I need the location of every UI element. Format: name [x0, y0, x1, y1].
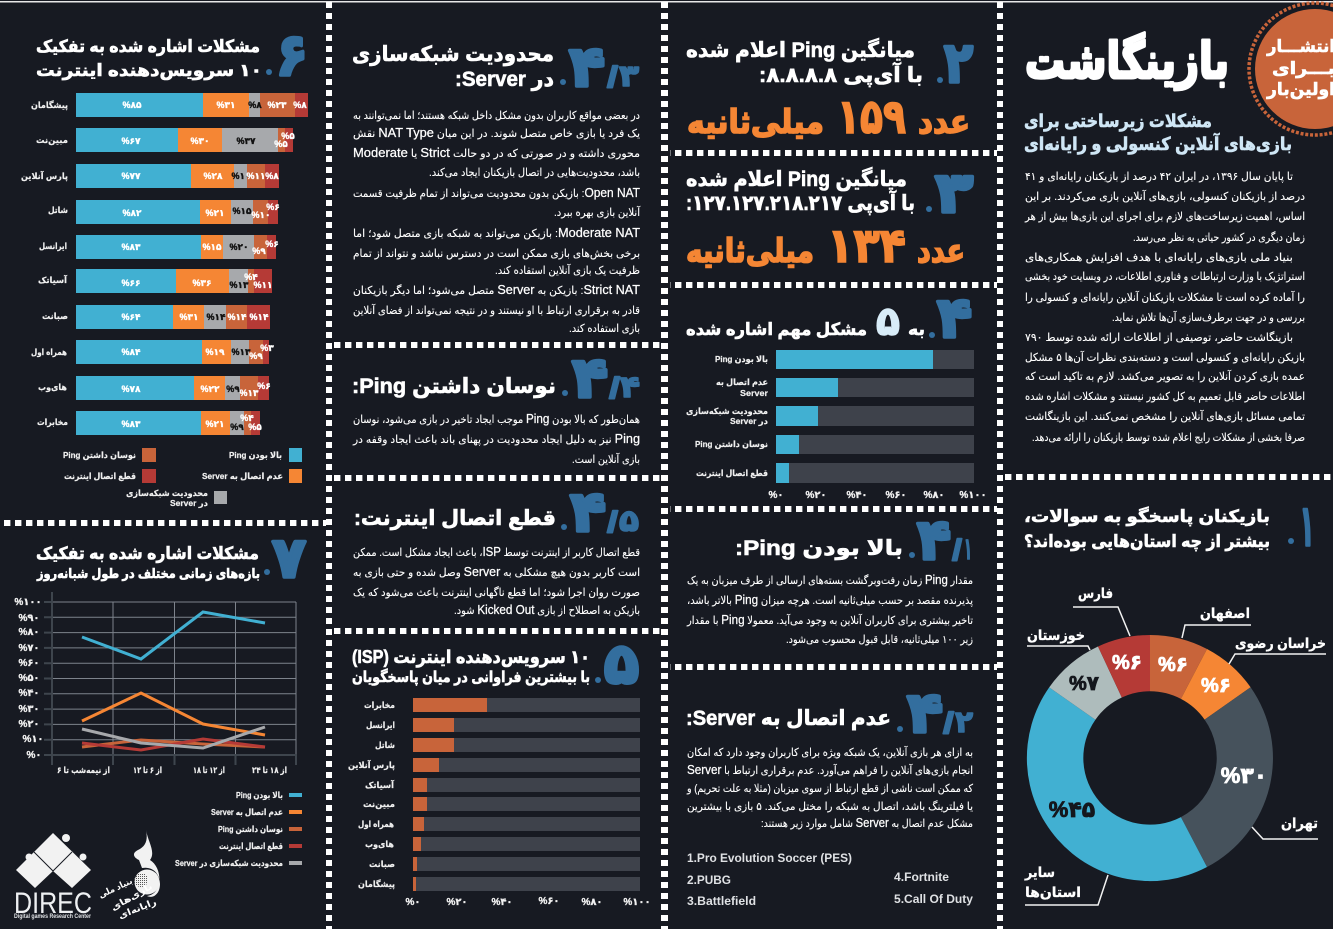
row: Asiatech: %۱۱ — [254, 280, 272, 290]
intro text: درصد از بازیکنان کنسولی، بازی‌های آنلاین بازی می‌کردند. بر این — [1025, 189, 1305, 203]
body text 4/5 — [353, 544, 640, 617]
legend panel 6: در Server — [170, 498, 209, 509]
body text 4/3: ظرفیت یک بازی آنلاین استفاده کند. — [495, 263, 640, 277]
numeral 1 — [1288, 494, 1314, 557]
value: 159 ms: میلی‌ثانیه — [687, 103, 824, 140]
list of games: 3.Battlefield — [687, 894, 756, 908]
row: Pishgaman: %۸ — [293, 100, 307, 110]
legend panel 6: نوسان داشتن Ping — [63, 450, 136, 461]
body text 4/3: Strict NAT: بازیکن به Server متصل می‌شود؛ اما دیگر بازیکنان — [353, 282, 640, 297]
row: Sabanet: %۶۴ — [122, 312, 141, 322]
heading panel 1: بازیکنان پاسخگو به سوالات، — [1024, 506, 1270, 527]
legend panel 7: بالا بودن Ping — [236, 790, 283, 801]
intro text: اساس، اهمیت زیرساخت‌های لازم برای اجرای این بازی‌ها بیش از هر — [1024, 211, 1305, 223]
x axis: %۸۰ — [581, 897, 603, 908]
x axis: %۸۰ — [923, 490, 945, 501]
row: Irancell: %۸۳ — [122, 242, 141, 252]
row: Mokhaberat: %۲۱ — [206, 419, 224, 429]
donut values: %۶ — [1158, 654, 1188, 676]
row: Pars Online: %۷۷ — [122, 171, 141, 181]
logo: DIREC — [14, 833, 92, 920]
body text 4/2: انجام بازی‌های آنلاین را فراهم می‌آورد. عدم برقراری ارتباط با Server — [687, 762, 973, 777]
ISP names: صبانت — [369, 859, 395, 869]
donut values — [1049, 652, 1267, 822]
row: Irancell: ایرانسل — [39, 241, 67, 252]
intro text: بازیکن رایانه‌ای و کنسولی است و دسته‌بندی نظرات آن‌ها ۵ مشکل — [1025, 350, 1305, 364]
row: Pars Online: پارس آنلاین — [21, 170, 68, 182]
value: 134 ms: ۱۳۴ — [827, 220, 906, 273]
heading 4/2: عدم اتصال به Server: — [686, 707, 891, 730]
row: Mobinnet: %۳۰ — [190, 136, 210, 146]
row: Pars Online: %۱۱ — [246, 171, 266, 181]
x axis: %۱۰۰ — [959, 490, 987, 501]
value: 159 ms — [687, 91, 970, 144]
ISP names: شاتل — [375, 740, 395, 750]
row: Shatel: %۱۵ — [232, 206, 252, 216]
x axis — [768, 490, 987, 501]
row: Mokhaberat: %۵ — [248, 422, 262, 432]
heading panel 6: ۱۰ سرویس‌دهنده اینترنت — [36, 61, 262, 81]
y axis labels — [14, 597, 44, 761]
row: HiWeb: %۱۳ — [240, 388, 259, 398]
row: Shatel: %۲۱ — [206, 208, 224, 218]
panel 4/3: network limitation — [352, 35, 641, 335]
body text 4/2: یا فیلترینگ باشد، اتصال به شبکه را مختل می‌کند. ۵ بازی با بیشترین — [687, 800, 973, 813]
ISP names: آسیاتک — [365, 779, 395, 790]
logo: national games foundation: بنیاد ملی — [97, 876, 134, 900]
body text 4/5: قطع اتصال کاربر از اینترنت توسط ISP، باعث ایجاد مشکل است. ممکن — [353, 544, 640, 559]
row: Pars Online — [21, 164, 279, 188]
intro text: بازینگاشت حاضر، توصیفی از اطلاعات ارائه شده توسط ۷۹۰ — [1025, 331, 1293, 344]
x axis: %۰ — [768, 490, 784, 501]
heading panel 4 — [686, 300, 925, 344]
intro text: را آماده کرده است تا مشکلات بازیکنان آنلاین رایانه‌ای و کنسولی را — [1025, 290, 1305, 304]
value: 159 ms: عدد — [918, 103, 970, 140]
body text 4/1 — [686, 572, 973, 646]
heading panel 3 — [686, 166, 915, 215]
body text 4/3: در بعضی مواقع کاربران بدون مشکل داخل شبکه هستند؛ اما نمی‌توانند به — [353, 110, 640, 122]
numeral 4/4: ۴ — [572, 346, 608, 409]
y axis labels: %۲۰ — [18, 719, 40, 730]
row: Pars Online: %۲۸ — [204, 171, 223, 181]
y axis labels: %۴۰ — [18, 688, 40, 699]
panel 4: five problems — [686, 286, 987, 501]
text: ۱ — [964, 533, 972, 566]
panel 3: ping 127.127.218.217 — [686, 161, 973, 273]
donut labels — [1024, 585, 1326, 900]
heading panel 3: میانگین Ping اعلام شده — [686, 166, 907, 191]
row: Hamrahe Aval: %۱۹ — [206, 347, 225, 357]
row: Mokhaberat — [37, 411, 262, 435]
row: Hamrahe Aval: همراه اول — [31, 347, 67, 358]
heading panel 2: با آی‌پی ۸.۸.۸.۸: — [759, 62, 923, 87]
body text 4/3: بازی استفاده کند. — [569, 323, 640, 335]
donut values: %۳۰ — [1221, 763, 1267, 788]
row: HiWeb: های‌وب — [38, 382, 67, 393]
panel 4/4: ping fluctuation — [352, 346, 640, 466]
body text 4/3 — [353, 110, 641, 335]
row: Hamrahe Aval: %۱۳ — [232, 347, 251, 357]
body text 4/1: تاخیر بیشتری برای کاربران آنلاین به وجود می‌آید. معمولا Ping با مقدار — [686, 612, 973, 627]
numeral 4/1: / — [952, 534, 963, 567]
bar chart: five problems — [686, 350, 987, 501]
problem names: محدودیت شبکه‌سازی — [686, 406, 768, 417]
donut values: %۶ — [1112, 652, 1142, 674]
row: Pishgaman: %۸۵ — [122, 100, 142, 110]
body text 4/2: که ممکن است ناشی از قطع ارتباط از سوی میزبان (مثلا به علت تحریم) و — [686, 783, 974, 795]
panel 1: provinces — [1024, 494, 1326, 905]
y axis labels: %۱۰۰ — [14, 597, 42, 608]
row: Shatel: %۸۲ — [122, 208, 142, 218]
body text 4/4 — [352, 411, 640, 466]
donut labels: تهران — [1281, 815, 1318, 832]
row: Pars Online: %۱۰ — [232, 171, 250, 181]
heading panel 1: بیشتر از چه استان‌هایی بوده‌اند؟ — [1024, 532, 1270, 552]
y axis labels: %۸۰ — [18, 627, 40, 638]
bar chart: ISP share — [348, 698, 651, 908]
intro text: تمامی مسائل بازی‌های آنلاین را مشخص نمی‌کنند. این بازینگاشت — [1025, 409, 1305, 423]
line chart — [14, 592, 296, 776]
numeral 2: ۲ — [944, 31, 973, 94]
row: Mokhaberat: %۴ — [240, 413, 254, 423]
legend panel 7: عدم اتصال به Server — [211, 807, 283, 818]
row: Mokhaberat: %۸۳ — [122, 419, 141, 429]
heading panel 5 — [352, 647, 590, 687]
problem names: در Server — [730, 416, 769, 427]
x axis labels: از ۱۲ تا ۱۸ — [193, 765, 225, 776]
heading panel 2 — [686, 37, 923, 87]
donut values: %۷ — [1069, 673, 1099, 695]
logo: DIREC: Digital games Research Center — [14, 914, 92, 920]
problem names — [686, 354, 769, 479]
numeral 4/2 — [897, 681, 973, 744]
ISP names: پارس آنلاین — [348, 759, 395, 771]
badge: first publication — [1249, 3, 1333, 135]
row: Irancell: %۱۵ — [202, 242, 222, 252]
row: Mobinnet: %۶۷ — [122, 136, 141, 146]
list of games — [687, 851, 973, 908]
x axis labels: از ۱۸ تا ۲۴ — [252, 765, 287, 776]
row: Asiatech: %۱۳ — [230, 280, 249, 290]
y axis labels: %۶۰ — [18, 658, 40, 669]
body text 4/2: مشکل عدم اتصال به Server شامل موارد زیر هستند: — [761, 815, 973, 830]
donut leader lines — [1025, 607, 1326, 905]
x axis: %۱۰۰ — [623, 897, 651, 908]
legend panel 7 — [175, 790, 302, 869]
problem names: نوسان داشتن Ping — [695, 439, 768, 450]
body text 4/4: Ping نیز به دلیل ایجاد محدودیت در پهنای باند باعث ایجاد وقفه در — [352, 431, 640, 446]
ISP names: پیشگامان — [358, 879, 395, 889]
value: 134 ms — [686, 220, 965, 273]
logo: national games foundation: بازی‌های — [109, 881, 154, 914]
donut chart — [1027, 635, 1273, 881]
ISP names: ایرانسل — [366, 720, 395, 731]
heading panel 7: مشکلات اشاره شده به تفکیک — [36, 544, 259, 563]
body text 4/3: برخی بخش‌های بازی ممکن است در دسترس نباشد و نتواند از تمام — [353, 248, 640, 260]
logo: national games foundation — [97, 830, 160, 922]
problem names: قطع اتصال اینترنت — [696, 468, 768, 479]
body text 4/1: مقدار Ping زمان رفت‌وبرگشت بسته‌های ارسالی از طرف میزبان به یک — [687, 572, 973, 587]
y axis labels: %۷۰ — [18, 643, 40, 654]
row: Shatel — [48, 200, 280, 224]
row: Pishgaman — [31, 93, 308, 117]
heading 4/1: بالا بودن Ping: — [735, 537, 903, 560]
heading panel 7 — [36, 544, 260, 581]
panel 4/5: internet disconnect — [353, 480, 640, 617]
row: Asiatech: %۴ — [244, 272, 258, 282]
problem names: بالا بودن Ping — [715, 354, 768, 365]
heading 4/3: در Server: — [455, 68, 554, 91]
row: Irancell: %۶ — [265, 239, 279, 249]
row: Sabanet: %۱۴ — [228, 312, 247, 322]
body text 4/3: Open NAT: بازیکن بدون محدودیت می‌تواند از تمام ظرفیت قسمت — [353, 185, 640, 200]
legend panel 7: نوسان داشتن Ping — [218, 824, 283, 835]
body text 4/3: آنلاین بازی بهره ببرد. — [554, 205, 641, 219]
x axis: %۲۰ — [446, 897, 468, 908]
problem names: Server — [740, 388, 769, 398]
intro text — [1024, 171, 1305, 444]
intro text: بررسی و در جهت برطرف‌سازی آن‌ها تلاش نماید. — [1112, 310, 1305, 324]
numeral 4/1 — [909, 508, 972, 571]
donut labels: فارس — [1078, 585, 1113, 601]
subtitle — [1024, 111, 1292, 155]
numeral 4/1: ۴ — [917, 508, 951, 571]
body text 4/3: یک فرد یا بازی خاص متصل شوند. در این میان NAT Type نقش — [353, 125, 640, 140]
donut labels: سایر — [1024, 864, 1055, 881]
x axis labels — [57, 765, 287, 776]
intro text: بنیاد ملی بازی‌های رایانه‌ای با هدف افزایش همکاری‌های — [1025, 252, 1293, 264]
ISP names: همراه اول — [358, 819, 394, 830]
row: Shatel: شاتل — [48, 205, 68, 215]
numeral 4: ۴ — [937, 286, 972, 349]
row: Pishgaman: %۳۱ — [216, 100, 236, 110]
numeral 4/4: / — [609, 372, 621, 405]
ISP names: های‌وب — [365, 839, 394, 850]
intro text: زمان دیگری در کشور حیاتی به نظر می‌رسد. — [1133, 231, 1305, 244]
y axis labels: %۰ — [26, 750, 42, 761]
row: Pars Online: %۸ — [265, 171, 279, 181]
list of games: 2.PUBG — [687, 873, 731, 887]
legend panel 6: قطع اتصال اینترنت — [64, 471, 136, 482]
heading panel 4: به — [908, 320, 925, 339]
legend panel 6: محدودیت شبکه‌سازی — [126, 488, 208, 499]
body text 4/3: قادر به برقراری ارتباط با او نیستند و در نتیجه نمی‌تواند از فضای آنلاین — [353, 303, 640, 317]
x axis: %۴۰ — [846, 490, 868, 501]
intro text: اطلاعات حاضر قابل تعمیم به کل کشور نیستند و مشکلات اشاره شده — [1025, 391, 1305, 403]
row: Pishgaman: پیشگامان — [31, 100, 68, 110]
heading panel 2: میانگین Ping اعلام شده — [686, 37, 915, 62]
numeral 4/3: ۳ — [619, 60, 639, 93]
donut values: %۶ — [1201, 675, 1231, 697]
numeral 4/2: ۴ — [907, 681, 943, 744]
row: Mobinnet — [36, 128, 295, 152]
row: Mobinnet: مبین‌نت — [36, 135, 68, 146]
panel 7: problems by time of day — [14, 526, 306, 922]
heading 4/3 — [352, 43, 554, 91]
heading 4/4: نوسان داشتن Ping: — [352, 375, 556, 398]
intro text: تا پایان سال ۱۳۹۶، در ایران ۴۲ درصد از بازیکنان رایانه‌ای و ۴۱ — [1025, 171, 1293, 183]
x axis — [406, 896, 651, 908]
list of games: 4.Fortnite — [894, 870, 949, 884]
row: Irancell: %۲۰ — [230, 242, 248, 252]
row: Hamrahe Aval: %۹ — [249, 351, 263, 361]
badge: first publication: بـــرای — [1272, 59, 1333, 79]
heading panel 3: با آی‌پی ۱۲۷.۱۲۷.۲۱۸.۲۱۷: — [686, 190, 915, 215]
ISP names: مخابرات — [364, 700, 395, 711]
body text 4/1: زیر ۱۰۰ میلی‌ثانیه، قابل قبول محسوب می‌شود. — [786, 634, 973, 646]
x axis: %۲۰ — [805, 490, 827, 501]
row: Sabanet — [42, 305, 270, 329]
legend panel 7: محدودیت شبکه‌سازی در Server — [175, 858, 283, 869]
numeral 4/2: / — [943, 707, 955, 740]
numeral 4/3 — [560, 35, 639, 98]
subtitle: بازی‌های آنلاین کنسولی و رایانه‌ای — [1024, 132, 1292, 155]
row: HiWeb: %۲۲ — [200, 384, 220, 394]
x axis labels: از ۶ تا ۱۲ — [133, 765, 162, 776]
numeral 4/4 — [562, 346, 640, 409]
donut labels: اصفهان — [1200, 605, 1250, 622]
legend panel 7: قطع اتصال اینترنت — [219, 841, 283, 852]
intro text: عمده بازی کردن آنلاین را به تصویر می‌کشد. لازم به تاکید است که — [1025, 369, 1305, 383]
row: HiWeb: %۶ — [257, 381, 271, 391]
row: Pishgaman: %۲۳ — [268, 100, 287, 110]
numeral 4/4: ۴ — [620, 371, 640, 404]
row: Hamrahe Aval: %۳ — [260, 343, 274, 353]
problem names: عدم اتصال به — [716, 377, 768, 388]
row: Asiatech: %۶۶ — [122, 278, 140, 288]
panel 6: problems by ISP — [21, 23, 308, 509]
heading panel 1 — [1024, 506, 1270, 552]
body text 4/5: بازیکن به اصطلاح از بازی Kicked Out شود. — [454, 602, 640, 617]
numeral 5: ۵ — [604, 632, 639, 695]
title: بازینگاشت — [1025, 32, 1229, 90]
x axis: %۶۰ — [885, 490, 907, 501]
y axis labels: %۵۰ — [18, 673, 40, 684]
data lines — [82, 612, 265, 750]
row: Sabanet: %۱۴ — [250, 312, 269, 322]
legend panel 6 — [63, 448, 302, 509]
ISP names — [348, 700, 395, 889]
panel 5: top ISPs — [348, 632, 651, 908]
row: Mokhaberat: %۹ — [230, 422, 244, 432]
row: HiWeb: %۷۸ — [122, 384, 141, 394]
numeral 4/5: ۴ — [570, 480, 606, 543]
panel 4/1: high ping — [686, 508, 973, 646]
body text 4/5: است کاربر بدون هیچ مشکلی به Server وصل شده و حتی بازی به — [353, 564, 640, 579]
body text 4/4: بازی آنلاین است. — [572, 452, 640, 466]
stacked bar chart by ISP — [21, 93, 308, 435]
heading panel 5: با بیشترین فراوانی در میان پاسخگویان — [352, 668, 590, 687]
heading panel 6: مشکلات اشاره شده به تفکیک — [36, 37, 260, 56]
row: Sabanet: صبانت — [42, 311, 68, 321]
row: Mobinnet: %۳۷ — [236, 136, 256, 146]
donut labels: خوزستان — [1027, 627, 1085, 644]
numeral 4/5 — [561, 480, 639, 543]
panel 2: ping 8.8.8.8 — [686, 31, 973, 144]
y axis labels: %۹۰ — [18, 613, 40, 624]
row: Shatel: %۶ — [266, 202, 280, 212]
legend panel 6: بالا بودن Ping — [229, 450, 282, 461]
row: Asiatech: %۳۶ — [192, 278, 212, 288]
x axis: %۴۰ — [491, 897, 513, 908]
row: Mobinnet: %۵ — [274, 139, 288, 149]
x axis labels: از نیمه‌شب تا ۶ — [57, 765, 110, 776]
heading panel 4: ۵ — [876, 300, 900, 344]
heading panel 4: مشکل مهم اشاره شده — [686, 320, 867, 340]
numeral 7: ۷ — [272, 526, 306, 589]
row: Irancell — [39, 235, 279, 259]
body text 4/3: محوری داشته و در صورتی که در دو حالت Strict یا Moderate — [353, 145, 640, 160]
row: Sabanet: %۳۱ — [180, 312, 198, 322]
body text 4/2 — [686, 745, 974, 830]
x axis: %۶۰ — [538, 896, 560, 907]
list of games: 5.Call Of Duty — [894, 892, 973, 906]
heading 4/5: قطع اتصال اینترنت: — [354, 507, 556, 530]
value: 159 ms: ۱۵۹ — [837, 91, 906, 144]
numeral 3: ۳ — [935, 161, 973, 224]
numeral 4/5: ۵ — [619, 505, 639, 538]
body text 4/3: باشد، محدودیت‌هایی در اتصال بازیکنان ایجاد می‌کند. — [429, 167, 640, 179]
row: Asiatech: آسیاتک — [38, 274, 68, 285]
row: Hamrahe Aval — [31, 340, 274, 364]
numeral 4/2: ۲ — [955, 706, 973, 739]
numeral 4/5: / — [607, 506, 619, 539]
row: Asiatech — [38, 269, 272, 293]
heading panel 7: بازه‌های زمانی مختلف در طول شبانه‌روز — [36, 566, 260, 581]
row: Mobinnet: %۵ — [281, 131, 295, 141]
x axis: %۰ — [406, 897, 420, 908]
y axis labels: %۱۰ — [22, 734, 44, 745]
body text 4/2: به ازای هر بازی آنلاین، یک شبکه ویژه برای کاربران وجود دارد که امکان — [687, 745, 973, 759]
row: Sabanet: %۱۴ — [206, 312, 226, 322]
body text 4/4: همان‌طور که بالا بودن Ping موجب ایجاد تاخیر در بازی می‌شود، نوسان — [353, 411, 640, 426]
donut values: %۴۵ — [1049, 797, 1095, 822]
panel 4/2: server connection failure — [686, 681, 974, 908]
body text 4/3: Moderate NAT: بازیکن می‌تواند به شبکه بازی متصل شود؛ اما — [353, 225, 640, 240]
donut labels: استان‌ها — [1025, 884, 1081, 900]
badge: first publication: اولین‌بار — [1266, 80, 1333, 100]
value: 134 ms: عدد — [917, 232, 965, 269]
numeral 4/3: ۴ — [569, 35, 605, 98]
row: HiWeb: %۹ — [226, 384, 240, 394]
heading panel 6 — [36, 37, 262, 81]
value: 134 ms: میلی‌ثانیه — [686, 232, 814, 269]
logo: DIREC: DIREC — [14, 887, 92, 920]
heading panel 5: ۱۰ سرویس‌دهنده اینترنت (ISP) — [352, 647, 590, 668]
y axis labels: %۳۰ — [18, 704, 40, 715]
row: HiWeb — [38, 376, 271, 400]
ISP names: مبین‌نت — [363, 799, 395, 810]
logo: national games foundation: رایانه‌ای — [117, 897, 158, 922]
numeral 6: ۶ — [276, 23, 308, 88]
body text 4/1: پذیرنده مقصد بر حسب میلی‌ثانیه است. هرچه میزان Ping بالاتر باشد، — [687, 592, 973, 607]
row: Pishgaman: %۸ — [248, 100, 262, 110]
legend panel 6: عدم اتصال به Server — [202, 471, 283, 482]
heading 4/3: محدودیت شبکه‌سازی — [352, 43, 554, 66]
row: Hamrahe Aval: %۸۴ — [122, 347, 141, 357]
row: Mokhaberat: مخابرات — [37, 417, 68, 428]
numeral 4/3: / — [607, 61, 619, 94]
body text 4/5: صورت روان اجرا شود؛ اما قطع ناگهانی اینترنت باعث می‌شود که یک — [353, 586, 640, 599]
row: Shatel: %۱۰ — [252, 210, 270, 220]
list of games: 1.Pro Evolution Soccer (PES) — [687, 851, 852, 865]
row: Irancell: %۹ — [252, 246, 266, 256]
subtitle: مشکلات زیرساختی برای — [1024, 111, 1212, 132]
